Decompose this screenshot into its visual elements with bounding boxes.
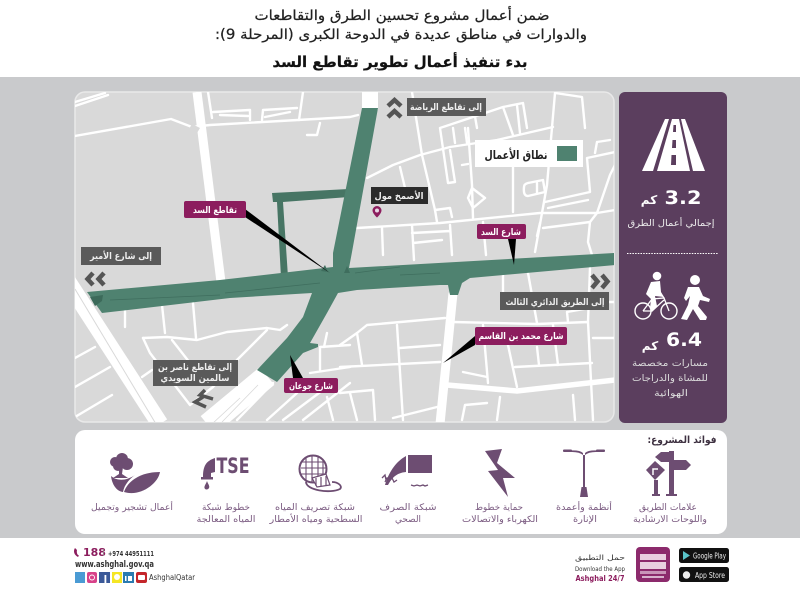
benefit: road signs: علامات الطريق xyxy=(639,503,697,513)
footer: contact details: 188 xyxy=(83,546,106,559)
label: Al Sadd street xyxy=(477,224,526,239)
badge: Google Play: Google Play xyxy=(693,552,726,560)
label: Asmakh Mall with pin: الأصمخ مول xyxy=(374,190,424,202)
benefit: surface and rainwater drainage xyxy=(268,456,362,525)
benefit: electricity and telecom protection: حماية خطوط xyxy=(475,503,523,513)
grey content band xyxy=(0,77,800,538)
stat: cycling and pedestrian paths 6.4 km: الهوائية xyxy=(654,389,688,399)
badge: Google Play xyxy=(679,548,729,563)
benefit: road signs: واللوحات الارشادية xyxy=(633,515,707,525)
footer: contact details xyxy=(74,546,196,583)
stat: cycling and pedestrian paths 6.4 km: كم xyxy=(642,339,658,353)
panel: project benefits xyxy=(75,430,727,534)
label: Mohammed bin Al Qassim street xyxy=(475,327,567,345)
stat: total road works 3.2 km xyxy=(628,187,714,229)
street network xyxy=(75,92,615,420)
pointer lines xyxy=(245,209,516,378)
stat: total road works 3.2 km: إجمالي أعمال الطرق xyxy=(628,217,714,229)
stat: cycling and pedestrian paths 6.4 km xyxy=(632,329,708,399)
works area: green road network xyxy=(87,108,615,382)
benefit: treated water lines (TSE) xyxy=(196,454,256,525)
title: والدوارات في مناطق عديدة في الدوحة الكبرى (المرحلة 9): xyxy=(215,27,587,43)
label: to Emir street: إلى شارع الأمير xyxy=(89,250,152,262)
benefit: landscaping: أعمال تشجير وتجميل xyxy=(91,501,173,513)
stat: cycling and pedestrian paths 6.4 km: للمشاة والدراجات xyxy=(632,374,708,384)
icon: pedestrian xyxy=(681,275,710,320)
stat: cycling and pedestrian paths 6.4 km: 6.4 xyxy=(666,329,702,351)
benefit: lighting poles xyxy=(556,450,612,525)
label: to Riyada intersection: إلى تقاطع الرياضة xyxy=(410,103,482,113)
legend: works area xyxy=(475,140,583,167)
map panel xyxy=(68,90,615,425)
panel: statistics xyxy=(619,92,727,423)
footer: contact details: www.ashghal.gov.qa xyxy=(75,560,154,570)
stat: total road works 3.2 km: كم xyxy=(641,193,657,207)
benefit: lighting poles: الإنارة xyxy=(573,515,597,525)
label: Jo'an street: شارع جوعان xyxy=(289,382,333,392)
label: to Riyada intersection xyxy=(407,98,486,116)
label: to Third Ring Road xyxy=(500,292,609,310)
footer: app download: Ashghal 24/7 xyxy=(576,574,624,583)
benefit: lighting poles: أنظمة وأعمدة xyxy=(556,501,612,513)
legend: works area: نطاق الأعمال xyxy=(484,147,548,162)
label: to Emir street xyxy=(81,247,161,265)
title: ضمن أعمال مشروع تحسين الطرق والتقاطعات xyxy=(254,6,550,24)
footer: contact details: +974 44951111 xyxy=(108,550,154,558)
footer: app download: Download the App xyxy=(575,565,625,573)
footer: app download xyxy=(575,547,729,583)
stat: total road works 3.2 km: 3.2 xyxy=(664,187,702,209)
label: Jo'an street xyxy=(284,378,338,393)
benefit: electricity and telecom protection: الكهرباء والاتصالات xyxy=(462,515,538,525)
label: Al Sadd street: شارع السد xyxy=(481,228,521,238)
label: Asmakh Mall with pin xyxy=(371,187,428,218)
benefit: electricity and telecom protection xyxy=(462,449,538,525)
icon: Ashghal app xyxy=(636,547,670,582)
footer: contact details: AshghalQatar xyxy=(149,573,196,582)
label: to Nasser bin Saleem Al Suwaidi intersection: سالمين السويدي xyxy=(160,374,230,384)
label: Al Sadd intersection: تقاطع السد xyxy=(193,206,237,216)
benefit: sewage network: شبكة الصرف xyxy=(380,503,436,513)
benefit: treated water lines (TSE): خطوط شبكة xyxy=(202,503,250,513)
label: Mohammed bin Al Qassim street: شارع محمد بن القاسم xyxy=(478,332,564,342)
benefit: sewage network xyxy=(380,455,436,525)
label: Al Sadd intersection xyxy=(184,201,246,218)
benefit: treated water lines (TSE): المياه المعالجة xyxy=(196,515,256,525)
benefit: surface and rainwater drainage: السطحية ومياه الأمطار xyxy=(268,513,362,525)
icon: cyclist xyxy=(635,272,677,319)
icon: road xyxy=(642,119,705,171)
benefit: landscaping xyxy=(91,453,173,513)
title: بدء تنفيذ أعمال تطوير تقاطع السد xyxy=(272,52,528,71)
label: to Nasser bin Saleem Al Suwaidi intersection xyxy=(153,360,238,386)
title xyxy=(215,6,587,71)
badge: App Store: App Store xyxy=(695,571,725,580)
social media icons xyxy=(75,572,147,583)
benefit: treated water lines (TSE): TSE xyxy=(216,454,250,478)
major white roads xyxy=(68,90,615,425)
direction arrows: chevrons xyxy=(88,100,608,407)
heading: project benefits: فوائد المشروع: xyxy=(648,435,716,446)
footer: app download: حمل التطبيق xyxy=(575,554,625,562)
badge: App Store xyxy=(679,567,729,582)
benefit: road signs xyxy=(633,451,707,525)
benefit: sewage network: الصحي xyxy=(395,515,421,525)
label: to Third Ring Road: إلى الطريق الدائري الثالث xyxy=(506,298,604,308)
stat: cycling and pedestrian paths 6.4 km: مسارات مخصصة xyxy=(632,359,708,369)
label: to Nasser bin Saleem Al Suwaidi intersection: إلى تقاطع ناصر بن xyxy=(158,363,232,373)
benefit: surface and rainwater drainage: شبكة تصريف المياه xyxy=(275,503,355,513)
